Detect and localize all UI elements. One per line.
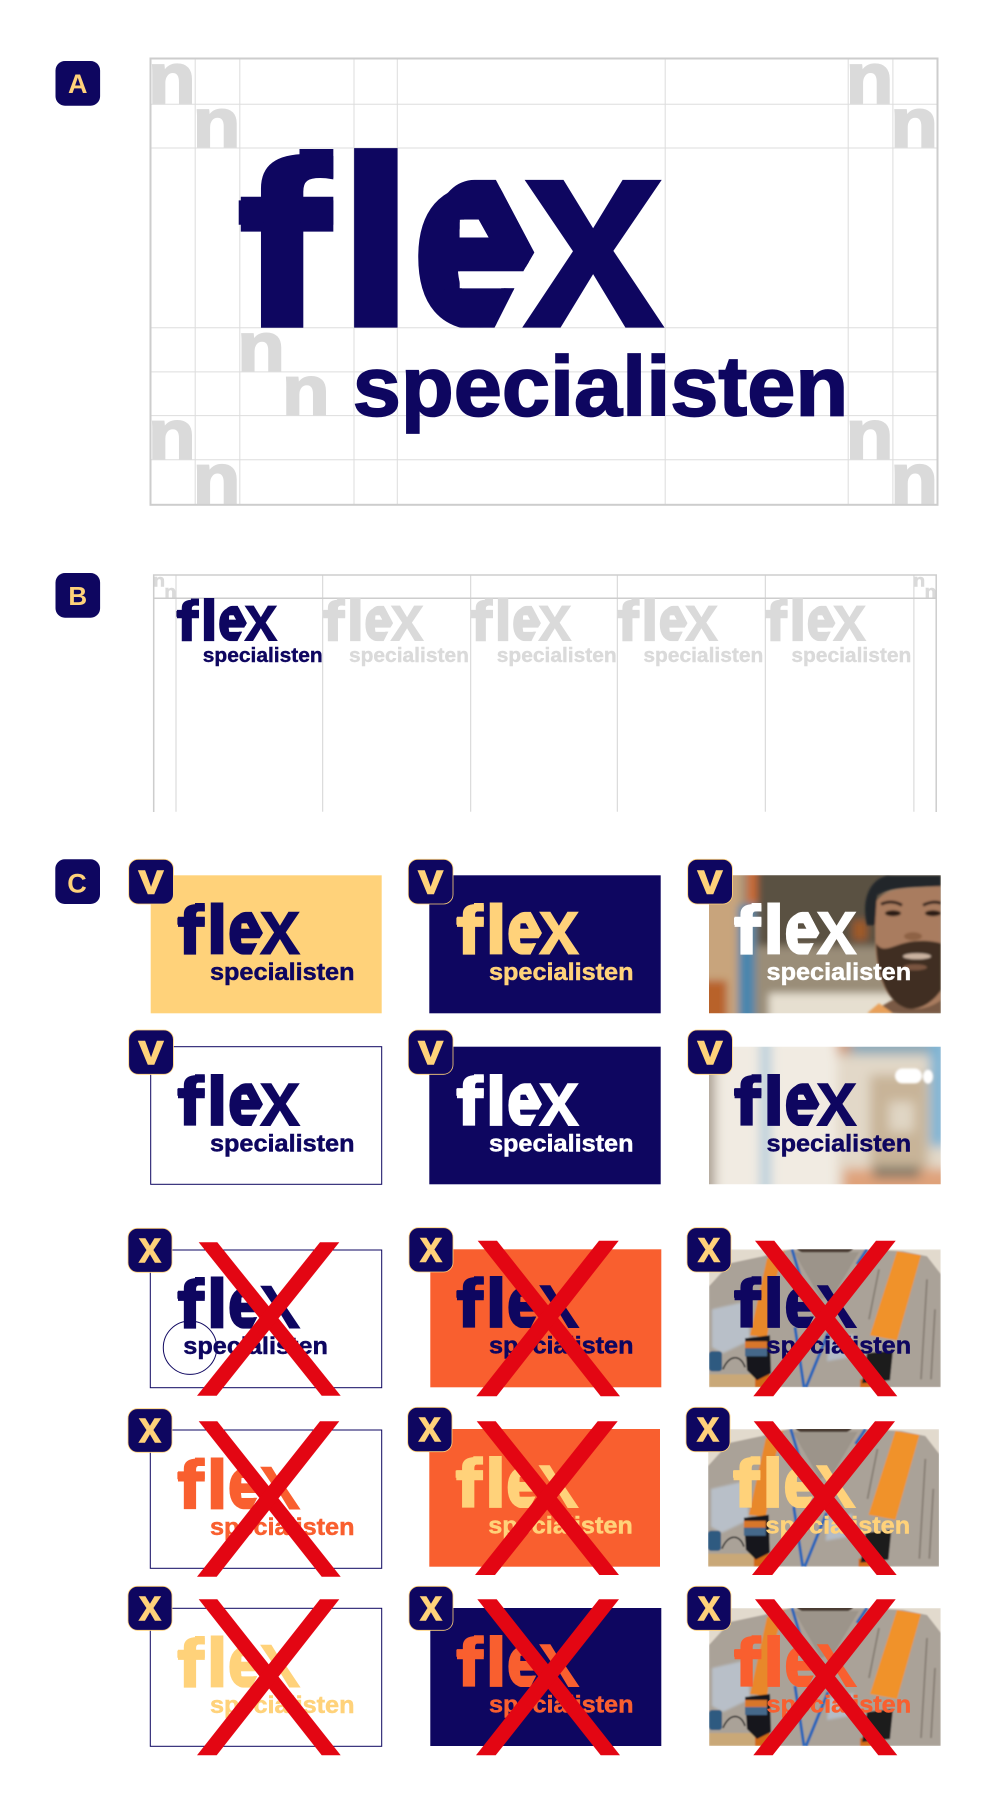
clearspace markers: n: n [925,582,937,601]
logo [456,902,632,986]
panel A: logo construction grid [56,38,938,519]
logo: x [816,882,858,972]
badge: X [128,1580,172,1630]
logo: specialisten [766,1512,910,1539]
badge: X: x [138,1580,162,1630]
badge: V [688,1030,732,1074]
logo: x [816,1614,858,1705]
badge: X [128,1402,172,1453]
logo: x [538,1255,581,1346]
clearspace markers: n: n [237,308,285,386]
red cross [197,1599,341,1755]
card: wrong, orange on busy photo [687,1580,941,1755]
logo [456,1456,632,1539]
clearspace markers: n [148,38,938,519]
logo: e [506,888,545,970]
logo: flex specialisten, large: x [520,75,668,387]
logo: grey 4: l [787,589,808,654]
clearspace markers: n: n [846,395,893,474]
badge: C: C [67,868,87,898]
logo [177,902,354,986]
logo: f [176,1626,205,1703]
logo: e [506,1620,545,1703]
card: wrong, orange on navy [409,1580,661,1755]
logo: specialisten [489,1332,634,1359]
logo: grey 4: f [764,591,788,653]
logo: grey 3 [618,598,762,666]
logo: grey 1: l [345,589,366,654]
panel B: logo repeat pattern [56,571,937,812]
logo [733,1456,909,1538]
logo: e [227,1262,266,1344]
logo: navy: e [218,585,249,654]
logo: grey 3: l [639,589,660,654]
badge: C [55,859,100,904]
badge: X: x [418,1401,441,1452]
card: correct, navy on light blurred photo [687,1030,941,1184]
logo: flex specialisten, large: f [235,112,334,377]
logo: f [732,1447,760,1523]
logo: l [483,891,509,970]
badge: V: V [698,864,723,900]
logo: grey 3: e [658,585,690,654]
logo: specialisten [489,1130,634,1157]
logo: x [816,1255,858,1346]
logo: e [227,1621,266,1703]
logo [177,1636,354,1718]
badge: B: B [68,581,87,611]
card: correct, navy on gold [129,859,382,1013]
logo: f [455,893,484,970]
logo [734,1276,910,1359]
logo: l [204,1446,230,1525]
logo: f [455,1626,484,1702]
logo: l [483,1444,508,1524]
logo: l [761,891,786,970]
logo: f [176,1267,205,1344]
logo: flex specialisten, large: e [411,93,545,380]
logo: x [259,1053,302,1144]
badge: V [408,1030,453,1074]
logo: l [204,1265,230,1344]
card: correct, white on navy [408,1030,661,1184]
logo: specialisten [767,1130,911,1157]
clearspace markers: n: n [153,571,165,590]
badge: X: x [420,1580,442,1630]
logo: specialisten [183,1333,328,1360]
logo: navy [176,598,322,666]
logo: x [259,882,302,972]
badge: B [56,573,100,618]
badge: V [129,1030,173,1074]
clearspace markers: n [153,571,937,601]
logo: f [455,1065,484,1141]
logo: f [455,1267,484,1343]
logo: l [483,1623,509,1703]
logo: grey 3: f [616,591,640,653]
logo [456,1276,632,1359]
card: wrong, gold on white [128,1580,382,1755]
logo: grey 2: l [493,589,514,654]
logo: f [733,1065,761,1141]
logo: e [784,1059,823,1142]
logo: x [538,1614,581,1705]
card: wrong, navy on orange [409,1221,661,1396]
logo: x [538,882,581,972]
logo: flex specialisten, large: l [332,104,420,381]
logo: grey 2: specialisten [497,645,617,667]
logo [734,1635,910,1718]
card: correct, white on portrait photo [687,858,941,1014]
badge: V [688,859,732,904]
circle marker [163,1321,217,1374]
clearspace markers: n: n [890,439,938,519]
card: wrong, gold on busy photo [686,1401,939,1575]
red cross [197,1421,341,1577]
logo: x [259,1256,302,1346]
logo: specialisten [489,1691,634,1718]
logo: specialisten [210,959,355,986]
card: wrong, gold on orange [408,1401,660,1575]
card: wrong, orange on white [128,1402,382,1577]
logo: e [227,1059,266,1142]
red cross [753,1241,897,1396]
card: wrong, clearspace violated [128,1222,382,1396]
logo: specialisten [210,1130,355,1157]
logo: grey 1 [323,598,468,666]
logo: f [176,1065,205,1141]
badge: X [409,1221,453,1272]
logo: grey 2: e [512,585,543,654]
badge: X [687,1221,731,1272]
badge: X: x [420,1221,442,1272]
badge: V: V [139,1035,164,1071]
logo: specialisten [767,959,911,986]
photo: blurred warehouse [709,1046,941,1184]
logo: e [783,1441,822,1524]
card: correct, navy on white [129,1030,382,1184]
logo: specialisten [210,1514,355,1541]
clearspace markers: n: n [913,571,925,590]
logo [456,1074,632,1157]
logo: e [784,888,823,970]
badge: V [408,859,453,904]
logo [177,1276,327,1360]
logo [177,1074,354,1157]
clearspace markers: n: n [890,84,938,162]
clearspace markers: n: n [148,395,196,474]
badge: X [687,1580,731,1630]
logo: f [176,1448,205,1524]
badge: V: V [139,864,164,900]
badge: X: x [138,1222,162,1272]
red cross [752,1421,897,1575]
logo: grey 2: x [538,581,572,656]
logo [734,902,910,986]
logo: grey 1: specialisten [349,645,469,667]
badge: X [686,1401,730,1452]
logo: e [784,1261,823,1344]
logo: l [204,1624,230,1703]
logo: l [761,1623,786,1703]
logo: flex specialisten, large: specialisten [353,339,848,434]
logo: navy: f [176,591,200,653]
logo: specialisten [489,959,634,986]
photo: shirt with straps [709,1608,941,1746]
badge: X: x [138,1402,162,1453]
logo: x [259,1436,302,1527]
badge: X: x [698,1221,720,1272]
logo: grey 2: f [470,591,494,653]
red cross [476,1241,620,1396]
logo: x [816,1053,858,1144]
logo: specialisten [767,1332,911,1359]
logo: x [815,1435,857,1526]
clearspace markers: n: n [164,582,176,601]
badge: V: V [698,1035,723,1071]
logo: grey 1: x [390,581,425,656]
badge: V [129,859,173,904]
logo: e [506,1261,545,1344]
logo: x [259,1615,302,1705]
logo: l [760,1444,785,1524]
badge: X: x [698,1580,720,1630]
clearspace markers: n: n [193,84,240,162]
clearspace markers: n: n [846,38,893,119]
logo: x [537,1435,580,1526]
logo [456,1635,632,1718]
logo [177,1458,354,1540]
badge: V: V [418,1035,444,1071]
logo: f [176,893,205,970]
logo: l [204,1062,230,1142]
clearspace markers: n: n [282,351,330,430]
logo: f [733,1626,761,1702]
logo: l [204,891,230,970]
badge: A [56,61,100,106]
clearspace markers: n: n [148,38,196,119]
logo: grey 3: x [684,581,719,656]
logo: grey 1: e [364,585,396,654]
logo: specialisten [210,1692,355,1719]
red cross [476,1599,620,1755]
logo: e [506,1441,544,1524]
card: correct, gold on navy [408,859,661,1013]
logo: grey 2 [471,598,616,666]
clearspace markers: n: n [193,439,240,519]
logo: l [483,1062,509,1142]
badge: X: x [696,1401,720,1452]
logo [734,1074,910,1157]
logo: grey 1: f [322,591,346,653]
red cross [475,1421,619,1575]
logo: f [733,893,761,970]
logo: l [761,1062,786,1142]
badge: X [409,1580,453,1630]
card: wrong, navy on busy photo [687,1221,941,1396]
logo: navy: specialisten [203,645,323,667]
logo: f [733,1267,761,1343]
badge: A: A [68,69,88,99]
logo: grey 4 [766,598,910,666]
logo: specialisten [488,1512,633,1539]
logo: specialisten [767,1691,911,1718]
logo: f [455,1447,483,1523]
logo: grey 4: x [832,581,867,656]
logo: flex specialisten, large [238,148,844,434]
logo: grey 4: e [806,585,838,654]
logo: grey 3: specialisten [643,645,763,667]
logo: l [483,1264,509,1344]
photo: shirt with straps [708,1429,939,1567]
logo: e [227,888,266,970]
badge: V: V [418,864,444,900]
logo: e [784,1620,823,1703]
logo: navy: l [199,589,220,654]
logo: grey 4: specialisten [791,645,911,667]
red cross [197,1242,341,1396]
badge: X [128,1222,172,1272]
logo: l [761,1264,786,1344]
photo: smiling worker [709,875,941,1014]
red cross [753,1599,897,1755]
badge: X [408,1401,452,1452]
logo: x [538,1053,581,1144]
logo: navy: x [244,581,278,656]
logo: e [506,1059,545,1142]
photo: shirt with straps [709,1249,941,1388]
logo: e [227,1443,266,1525]
